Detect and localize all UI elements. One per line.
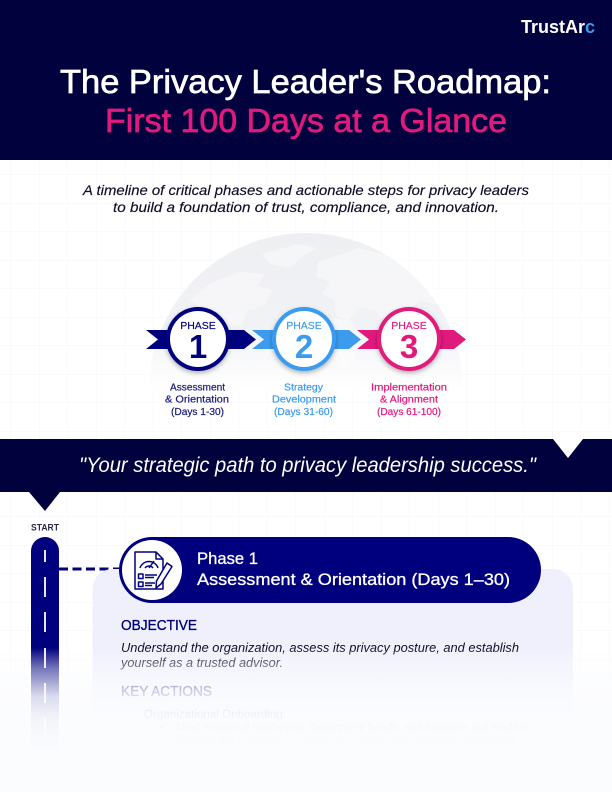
label: phase 2: Strategy	[284, 382, 323, 394]
circle: phase 2	[272, 307, 336, 371]
connector: road to phase 1	[59, 568, 119, 570]
label: phase 1: (Days 1-30)	[171, 407, 224, 418]
quote banner	[0, 439, 612, 511]
objective text: yourself as a trusted advisor.	[120, 655, 283, 670]
heading: key actions: KEY ACTIONS	[121, 683, 212, 700]
circle: phase 1: 1	[189, 328, 207, 365]
quote banner: "Your strategic path to privacy leadership success."	[79, 454, 537, 477]
circle: phase 3: PHASE	[391, 320, 427, 332]
phase 3 badge	[357, 307, 466, 418]
label: phase 2: Development	[272, 394, 336, 406]
circle: phase 1: PHASE	[180, 320, 216, 332]
circle: phase 3	[377, 307, 441, 371]
phase 1 pill header	[119, 537, 541, 603]
circle: phase 2: PHASE	[286, 320, 322, 332]
bottom fade	[0, 640, 612, 792]
circle: phase 1	[166, 307, 230, 371]
key actions list: •	[160, 735, 164, 747]
ribbon: phase 1	[146, 330, 256, 349]
logo: TrustArc: TrustArc	[521, 16, 595, 37]
label: phase 3	[371, 382, 447, 418]
icon: assessment checklist	[122, 540, 182, 600]
key actions list: Review the company's structure, culture, and strategic objectives	[176, 735, 516, 747]
label: phase 3: Implementation	[371, 382, 447, 394]
phase 2 badge	[252, 307, 361, 418]
label: phase 3: & Alignment	[380, 394, 438, 406]
subtitle	[82, 182, 529, 215]
header band	[0, 0, 612, 160]
label: phase 1: Assessment	[170, 382, 225, 394]
title	[60, 63, 551, 139]
label: phase 3: (Days 61-100)	[377, 407, 441, 418]
label: phase 2	[272, 382, 336, 418]
phase 1 pill text: Assessment & Orientation (Days 1–30)	[197, 570, 510, 589]
timeline road	[31, 537, 59, 755]
label: phase 1: & Orientation	[165, 394, 229, 406]
heading: objective: OBJECTIVE	[121, 617, 197, 634]
title: The Privacy Leader's Roadmap:	[60, 63, 551, 100]
key actions list: Organizational Onboarding:	[144, 709, 286, 721]
label: phase 2: (Days 31-60)	[274, 407, 333, 418]
globe illustration	[149, 233, 463, 390]
panel: phase 1 details	[92, 569, 573, 747]
ribbon: phase 2	[252, 330, 361, 349]
label: phase 1	[165, 382, 229, 418]
ribbon: phase 3	[357, 330, 466, 349]
circle: phase 3: 3	[400, 328, 418, 365]
subtitle: A timeline of critical phases and actionable steps for privacy leaders	[82, 182, 529, 198]
key actions list: Meet executive leadership, department heads, and business unit leaders	[176, 722, 528, 734]
key actions list: •	[160, 722, 164, 734]
phase 1 pill text	[197, 549, 510, 589]
phase 1 badge	[146, 307, 256, 418]
objective text	[120, 640, 519, 670]
title: First 100 Days at a Glance	[105, 102, 507, 139]
start label: START	[31, 522, 59, 532]
key actions list	[144, 709, 528, 747]
subtitle: to build a foundation of trust, compliance, and innovation.	[113, 199, 499, 215]
circle: phase 2: 2	[295, 328, 313, 365]
phase 1 pill text: Phase 1	[197, 549, 258, 568]
objective text: Understand the organization, assess its privacy posture, and establish	[121, 640, 519, 655]
